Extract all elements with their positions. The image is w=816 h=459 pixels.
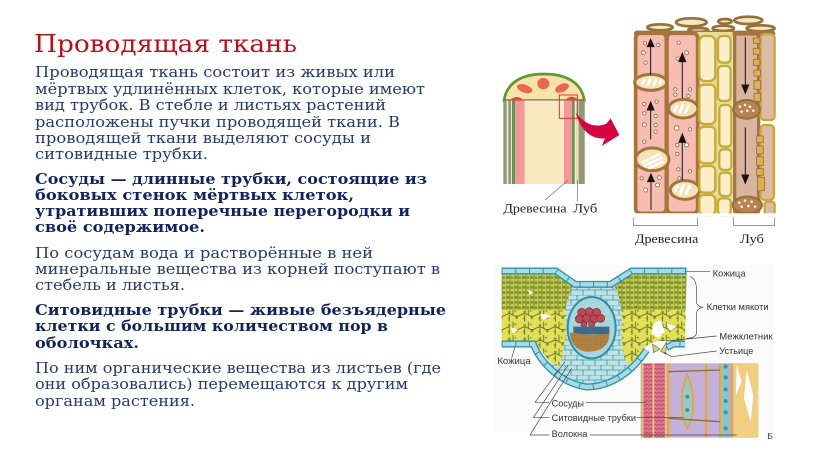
text block: sieve tubes definition: клетки с большим количеством пор в (35, 317, 388, 335)
bracket: phloem (734, 217, 775, 226)
text block: intro (35, 63, 425, 163)
epidermis top (502, 271, 687, 284)
text block: vessels definition (35, 170, 427, 236)
parenchyma cells (699, 36, 731, 215)
text block: intro: Проводящая ткань состоит из живых или (35, 63, 395, 81)
text block: sieve tubes definition (35, 301, 446, 352)
bracket: wood (633, 217, 698, 226)
arrows in vessels (647, 39, 686, 210)
stoma (653, 342, 667, 354)
inset tissue (641, 363, 758, 438)
leaf labels: Устьице (719, 346, 753, 356)
vessel cells (636, 33, 698, 213)
text block: intro: расположены пучки проводящей ткани. В (35, 113, 400, 131)
text block: vessels definition: боковых стенок мёртвых клеток, (35, 186, 354, 204)
leader lines (512, 272, 737, 435)
label: phloem left: Луб (573, 202, 597, 216)
text block: intro: ситовидные трубки. (35, 145, 208, 163)
palisade mesophyll (502, 272, 687, 310)
text block: sieve tubes function: они образовались) перемещаются к другим (35, 375, 408, 393)
leaf labels: Кожица (713, 269, 746, 279)
phloem (570, 332, 609, 352)
title: Проводящая ткань (34, 30, 297, 58)
text block: intro: мёртвых удлинённых клеток, которые имеют (35, 80, 425, 98)
text block: vessels function: стебель и листья. (35, 276, 185, 294)
text block: vessels function: По сосудам вода и растворённые в ней (35, 244, 373, 262)
yellow backing (697, 32, 733, 214)
text block: intro: проводящей ткани выделяют сосуды и (35, 129, 371, 147)
leaf labels: Кожица (497, 356, 531, 366)
text block: vessels definition: Сосуды — длинные трубки, состоящие из (35, 170, 427, 188)
leaf labels: Межклетник (719, 331, 773, 341)
bundle parenchyma (543, 283, 632, 387)
tissue section (632, 17, 777, 216)
text block: vessels definition: своё содержимое. (35, 218, 205, 236)
label: phloem right: Луб (740, 232, 764, 246)
spongy mesophyll (502, 310, 686, 367)
label: wood right: Древесина (635, 232, 699, 246)
text block: vessels function: минеральные вещества из корней поступают в (35, 260, 440, 278)
text block: sieve tubes function: По ним органические вещества из листьев (где (35, 359, 441, 377)
leaf labels (497, 269, 773, 441)
text block: vessels function (35, 244, 440, 294)
sheath (568, 297, 616, 358)
text block: sieve tubes function: органам растения. (35, 392, 195, 410)
air gaps (510, 290, 677, 338)
text block: sieve tubes definition: оболочках. (35, 334, 139, 352)
label: wood left: Древесина (503, 202, 567, 216)
diagram: stem and conducting tissue (503, 17, 777, 246)
faint background (495, 265, 775, 432)
blue band (573, 327, 609, 334)
text block: intro: вид трубок. В стебле и листьях растений (35, 96, 386, 114)
diagram: leaf cross-section (495, 265, 775, 441)
text block: sieve tubes function (35, 359, 441, 410)
text block: vessels definition: утративших поперечные перегородки и (35, 202, 410, 220)
leaf labels: Б (767, 431, 773, 441)
stem section (503, 74, 585, 202)
leaf labels: Ситовидные трубки (552, 413, 636, 423)
text block: sieve tubes definition: Ситовидные трубки — живые безъядерные (35, 301, 446, 319)
leaf labels: Волокна (552, 429, 587, 439)
leaf labels: Клетки мякоти (707, 302, 769, 312)
sieve tubes (735, 34, 759, 213)
arrow: magnify (576, 113, 619, 146)
leaf labels: Сосуды (552, 399, 584, 409)
xylem (575, 308, 605, 327)
tops of cells (647, 17, 775, 32)
epidermis bottom (502, 344, 685, 387)
